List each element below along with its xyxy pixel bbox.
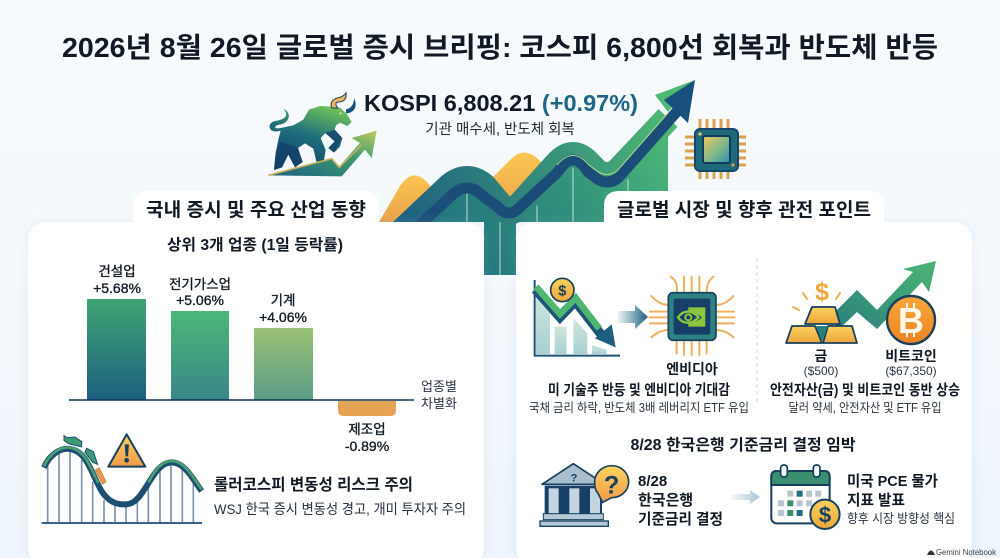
- left column caption: 엔비디아: [666, 361, 718, 377]
- BOK decision text: [638, 473, 723, 528]
- bar chart: 제조업: [348, 422, 386, 437]
- right column caption: 안전자산(금) 및 비트코인 동반 상승: [770, 382, 960, 399]
- icon: central bank: ?: [604, 471, 619, 499]
- icon: calendar with coin: $: [819, 502, 831, 527]
- icon: central bank: [540, 464, 629, 526]
- icon: bull on rising arrow: [268, 93, 377, 176]
- divider: [756, 258, 758, 402]
- risk description: WSJ 한국 증시 변동성 경고, 개미 투자자 주의: [214, 501, 466, 517]
- icon: semiconductor chip: [685, 119, 746, 179]
- KOSPI headline: [364, 90, 638, 138]
- icon: calendar with coin: [771, 465, 840, 529]
- icon: bitcoin: [887, 296, 935, 344]
- bar chart: 전기가스업: [169, 277, 231, 292]
- asset labels: ($500): [804, 364, 838, 378]
- BOK section heading: 8/28 한국은행 기준금리 결정 임박: [630, 436, 856, 454]
- PCE text: [847, 473, 955, 526]
- bar chart: 기계: [271, 293, 295, 308]
- arrow beneath bull: [268, 131, 377, 176]
- bar chart: -0.89%: [345, 438, 389, 454]
- icon: green rising arrow: [832, 261, 936, 330]
- panel: domestic market: [28, 191, 484, 558]
- bull body: [270, 106, 352, 170]
- risk heading: 롤러코스피 변동성 리스크 주의: [214, 476, 413, 494]
- PCE text: 지표 발표: [847, 492, 905, 509]
- asset labels: 비트코인: [885, 348, 937, 364]
- asset labels: 금: [815, 348, 828, 364]
- panel tab: [133, 191, 379, 222]
- BOK decision text: 한국은행: [638, 492, 693, 509]
- BOK decision text: 8/28: [638, 473, 667, 490]
- PCE text: 향후 시장 방향성 핵심: [847, 511, 955, 526]
- arrow: decision to data: [730, 490, 760, 504]
- icon: central bank: ?: [571, 473, 578, 485]
- icon: falling tech chart: [535, 278, 620, 356]
- icon: gold bars: $: [815, 278, 829, 306]
- icon: bitcoin: B: [898, 300, 924, 341]
- panel tab: [604, 191, 884, 222]
- PCE text: 미국 PCE 물가: [847, 473, 938, 490]
- watermark: Gemini Notebook: [936, 548, 997, 557]
- green area under the line: [407, 125, 668, 275]
- bull horns: [331, 93, 346, 108]
- bar chart: [69, 264, 457, 454]
- KOSPI subtitle: 기관 매수세, 반도체 회복: [425, 121, 575, 138]
- panel heading: 국내 증시 및 주요 산업 동향: [146, 199, 366, 221]
- icon: falling tech chart: $: [558, 283, 566, 299]
- bar chart: 업종별: [421, 379, 457, 394]
- arrow head: [655, 80, 695, 112]
- icon: gold bars: [786, 278, 857, 343]
- asset labels: ($67,350): [885, 364, 937, 378]
- right column caption: [770, 382, 960, 415]
- title: 2026년 8월 26일 글로벌 증시 브리핑: 코스피 6,800선 회복과 반도체 반등: [62, 32, 938, 63]
- chart heading: 상위 3개 업종 (1일 등락률): [167, 236, 343, 254]
- bar chart: +5.68%: [93, 280, 141, 296]
- light vertical grid lines: [467, 165, 628, 275]
- bar chart: 건설업: [98, 264, 136, 279]
- bar chart: 차별화: [421, 396, 457, 411]
- left column caption: [529, 361, 749, 415]
- yellow mountains: [379, 152, 560, 222]
- icon: warning triangle: [108, 434, 145, 467]
- icon: NVIDIA chip: [649, 277, 735, 355]
- right column caption: 달러 약세, 안전자산 및 ETF 유입: [788, 400, 942, 415]
- panel: global market: [516, 191, 972, 558]
- central rising market chart: [379, 80, 695, 275]
- trend ribbon: [395, 118, 668, 238]
- BOK decision text: 기준금리 결정: [638, 511, 723, 528]
- asset labels: [804, 348, 937, 378]
- KOSPI headline: KOSPI 6,808.21 (+0.97%): [364, 90, 638, 116]
- icon: roller coaster: [42, 436, 202, 523]
- arrow: chart to chip: [617, 305, 648, 329]
- left column caption: 미 기술주 반등 및 엔비디아 기대감: [548, 382, 730, 399]
- panel heading: 글로벌 시장 및 향후 관전 포인트: [617, 199, 871, 221]
- bar chart: +5.06%: [176, 292, 224, 308]
- bar chart: +4.06%: [259, 309, 307, 325]
- left column caption: 국채 금리 하락, 반도체 3배 레버리지 ETF 유입: [529, 401, 749, 415]
